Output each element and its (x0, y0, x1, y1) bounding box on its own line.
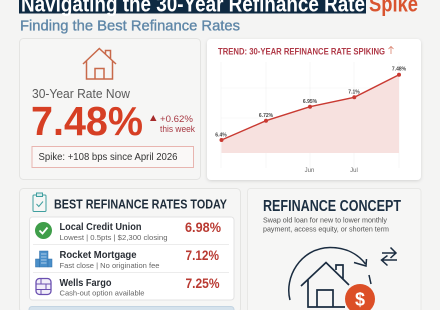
row: rocket mortgage: Rocket Mortgage (60, 249, 137, 261)
row: local credit union: Lowest | 0.5pts | $2,300 closing (60, 233, 168, 242)
spike callout: Spike: +108 bps since April 2026 (38, 151, 178, 163)
row: local credit union (35, 220, 221, 242)
heading: REFINANCE CONCEPT (263, 198, 401, 215)
lender list (30, 217, 234, 300)
row: wells fargo: 7.25% (186, 276, 220, 291)
panel: refinance concept (248, 188, 421, 310)
axis labels (305, 168, 358, 174)
line chart (215, 66, 407, 153)
panel: trend chart (207, 39, 421, 180)
row: wells fargo (36, 276, 220, 298)
row: wells fargo: Wells Fargo (60, 277, 112, 289)
icon: exchange arrows (382, 248, 397, 266)
panel: best refinance rates (20, 188, 240, 310)
row: rocket mortgage: 7.12% (186, 248, 219, 263)
description: Swap old loan for new to lower monthly (263, 216, 387, 224)
icon: circular arrow (289, 248, 371, 300)
line chart: 7.48% (392, 66, 407, 72)
weekly change: +0.62% (160, 114, 194, 125)
panel: current rate (20, 38, 200, 180)
row: rocket mortgage: Fast close | No origination fee (60, 261, 160, 270)
line chart: 6.95% (303, 99, 318, 105)
heading: BEST REFINANCE RATES TODAY (54, 196, 227, 212)
icon: up arrow (388, 46, 394, 54)
description (263, 216, 389, 234)
line chart: 7.1% (348, 90, 360, 96)
row: local credit union: Local Credit Union (60, 221, 142, 233)
rate label: 30-Year Rate Now (32, 86, 131, 101)
spike callout (32, 146, 194, 168)
row: wells fargo: Cash-out option available (60, 288, 144, 298)
rate value: 7.48% (31, 98, 143, 144)
row: local credit union: 6.98% (185, 220, 221, 235)
weekly change (150, 114, 195, 134)
icon: dollar coin: $ (355, 290, 365, 310)
icon: house (301, 262, 349, 307)
line chart: 6.4% (215, 132, 227, 138)
line chart: 6.72% (259, 113, 274, 119)
subtitle: Finding the Best Refinance Rates (20, 18, 240, 34)
weekly change: this week (160, 124, 195, 134)
icon: dollar coin (345, 284, 375, 310)
chart title: TREND: 30-YEAR REFINANCE RATE SPIKING (218, 46, 385, 56)
icon: clipboard (33, 193, 46, 212)
icon: house (83, 48, 116, 79)
description: payment, access equity, or shorten term (263, 224, 389, 234)
axis labels: Jun (305, 168, 314, 174)
row: rocket mortgage (36, 248, 219, 270)
blue note box (29, 306, 234, 310)
axis labels: Jul (350, 168, 358, 174)
